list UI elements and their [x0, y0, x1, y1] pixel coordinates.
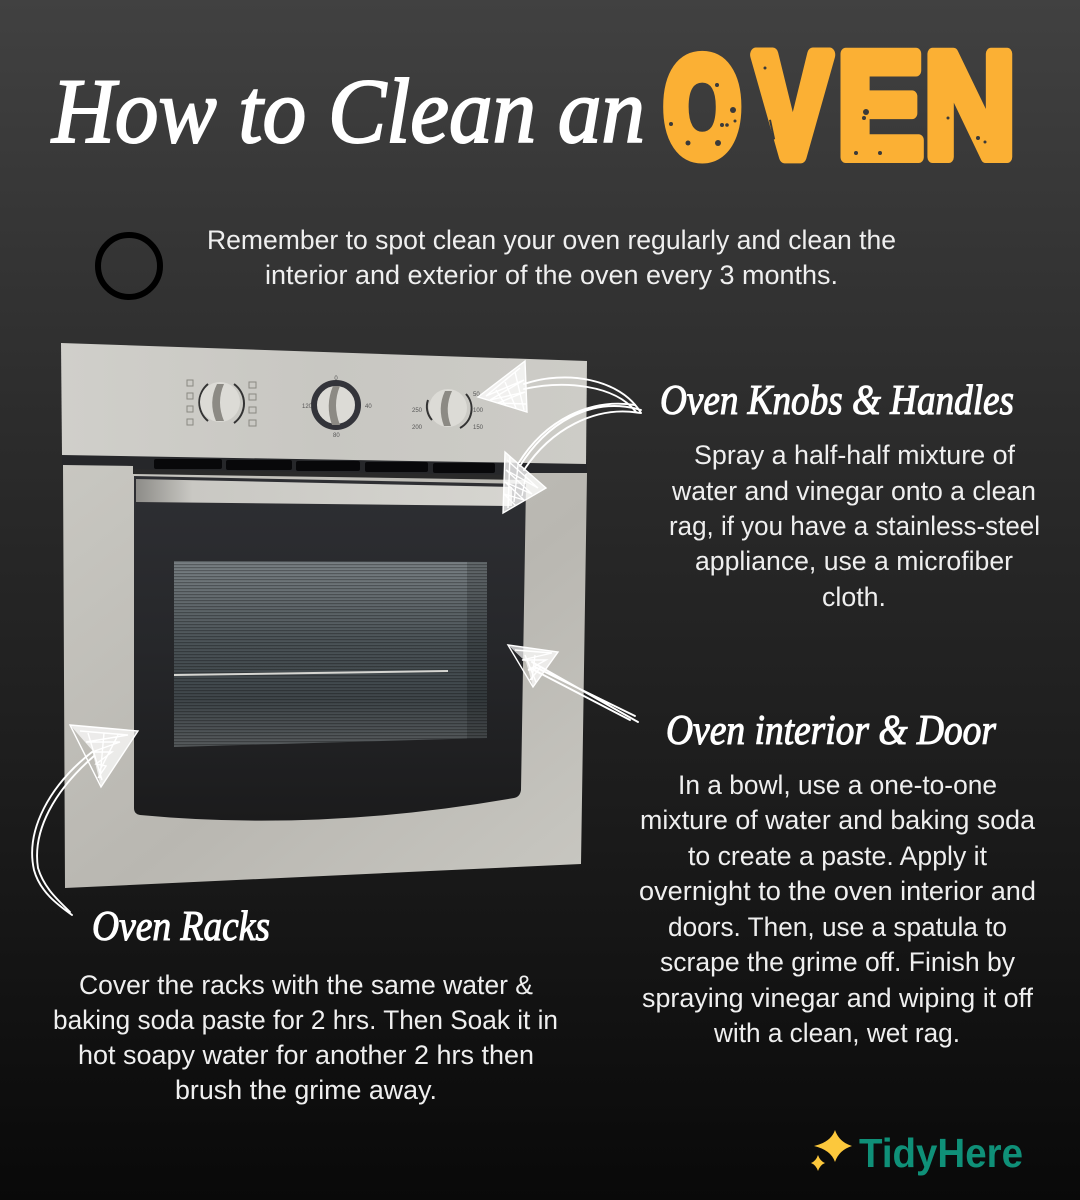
- title word OVEN: [665, 21, 1016, 189]
- arrow: interior: [508, 645, 638, 722]
- arrow: knobs: [478, 361, 641, 413]
- body: appliance, use a microfiber: [695, 546, 1013, 576]
- body: with a clean, wet rag.: [713, 1018, 960, 1048]
- body: [53, 970, 558, 1105]
- body: rag, if you have a stainless-steel: [669, 511, 1040, 541]
- intro text: Remember to spot clean your oven regularly and clean the: [207, 225, 896, 255]
- knob right: 150: [473, 425, 484, 431]
- heading: Oven Racks: [92, 904, 270, 950]
- intro text: [207, 225, 896, 290]
- oven rack line: [174, 671, 448, 675]
- section: knobs and handles: [660, 378, 1040, 612]
- oven gap strip: [62, 452, 587, 476]
- knob right: 50: [473, 392, 480, 398]
- knob right: 200: [412, 425, 423, 431]
- body: spraying vinegar and wiping it off: [642, 983, 1034, 1013]
- body: mixture of water and baking soda: [640, 805, 1035, 835]
- knob middle: 80: [333, 433, 340, 439]
- title script text: How to Clean an: [51, 60, 645, 162]
- body: doors. Then, use a spatula to: [668, 912, 1007, 942]
- body: Cover the racks with the same water &: [79, 970, 533, 1000]
- arrow: handles: [503, 404, 641, 513]
- body: In a bowl, use a one-to-one: [678, 770, 997, 800]
- body: to create a paste. Apply it: [688, 841, 988, 871]
- knob middle: 120: [302, 404, 313, 410]
- heading: Oven interior & Door: [666, 708, 997, 754]
- intro circle icon: [98, 235, 160, 297]
- title word OVEN: V: [755, 23, 830, 187]
- body: cloth.: [822, 582, 886, 612]
- knob middle: 0: [334, 376, 338, 382]
- section: racks: [53, 904, 558, 1105]
- title word OVEN: E: [837, 21, 924, 189]
- knob right: 250: [412, 408, 423, 414]
- body: [669, 440, 1040, 612]
- body: baking soda paste for 2 hrs. Then Soak it in: [53, 1005, 558, 1035]
- door handle: [136, 479, 512, 506]
- body: hot soapy water for another 2 hrs then: [78, 1040, 534, 1070]
- body: overnight to the oven interior and: [639, 876, 1036, 906]
- body: [639, 770, 1036, 1048]
- oven photo: [61, 343, 587, 888]
- heading: Oven Knobs & Handles: [660, 378, 1014, 424]
- body: Spray a half-half mixture of: [694, 440, 1016, 470]
- knob right: 100: [473, 408, 484, 414]
- vents: [154, 459, 495, 473]
- body: water and vinegar onto a clean: [671, 476, 1036, 506]
- intro text: interior and exterior of the oven every 3 months.: [265, 260, 838, 290]
- arrow: racks: [32, 725, 138, 915]
- title word OVEN: N: [924, 22, 1016, 189]
- knob left: [187, 380, 256, 426]
- oven door: [63, 465, 587, 888]
- body: brush the grime away.: [175, 1075, 437, 1105]
- knob middle: 40: [365, 404, 372, 410]
- section: interior and door: [639, 708, 1036, 1048]
- logo wordmark: TidyHere: [859, 1130, 1023, 1176]
- logo: [811, 1130, 1023, 1176]
- body: scrape the grime off. Finish by: [660, 947, 1016, 977]
- door window: [134, 476, 526, 821]
- title: [51, 21, 1016, 189]
- logo stars: [811, 1130, 852, 1171]
- inner glass: [174, 561, 487, 747]
- knob right: [412, 389, 484, 431]
- title word OVEN: O: [665, 30, 740, 183]
- knob middle: [302, 376, 372, 439]
- control panel: [61, 343, 587, 464]
